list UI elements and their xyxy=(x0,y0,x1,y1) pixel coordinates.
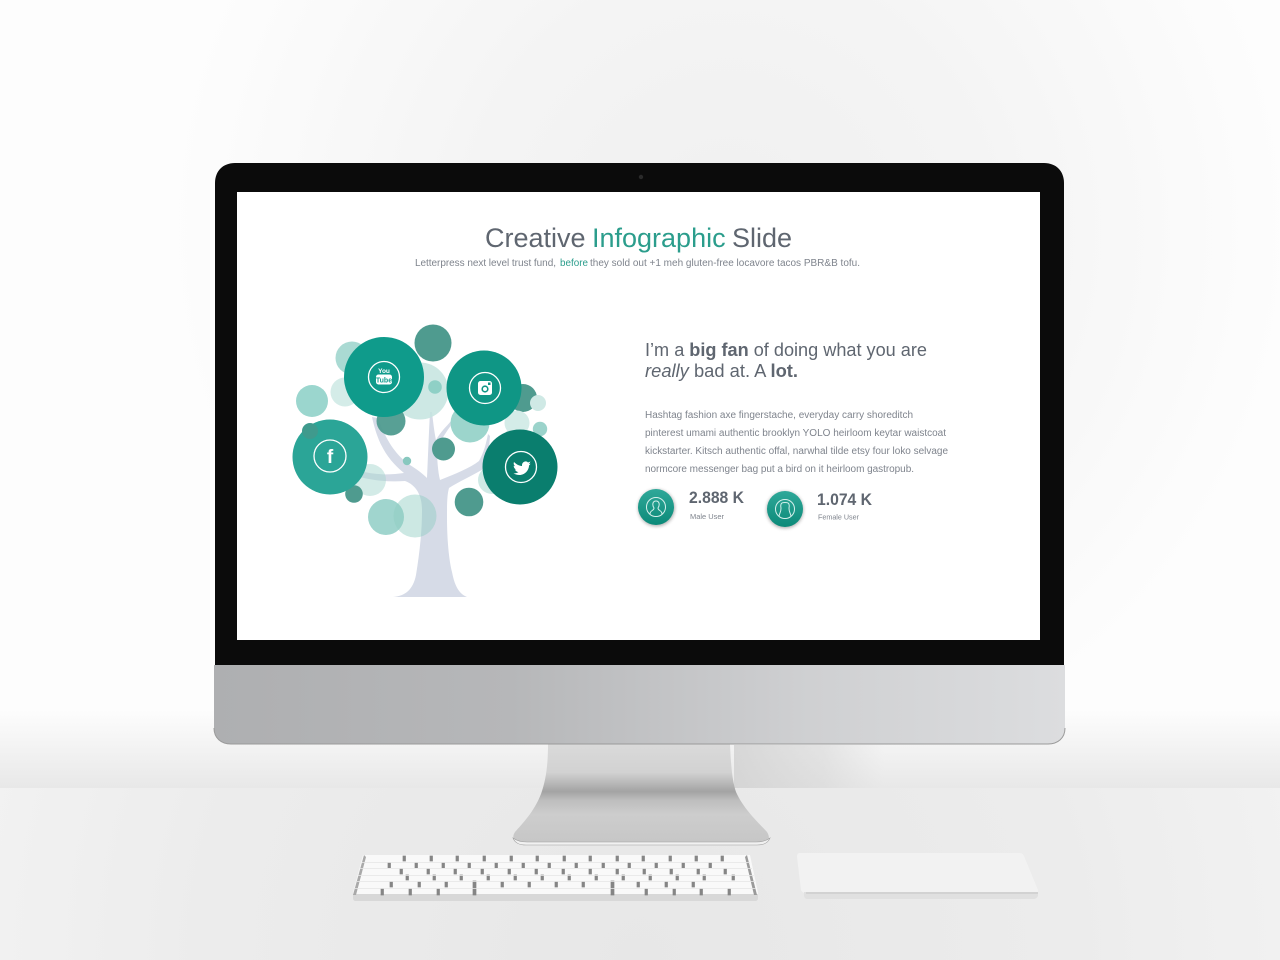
monitor xyxy=(214,163,1065,744)
monitor stand xyxy=(513,744,770,845)
slide subtitle: they sold out +1 meh gluten-free locavore tacos PBR&B tofu. xyxy=(590,258,860,269)
twitter bubble xyxy=(482,430,558,504)
stat: female user: 1.074 K xyxy=(817,491,872,509)
callout heading: I’m a big fan of doing what you are xyxy=(645,339,927,360)
tree illustration xyxy=(292,324,558,597)
leaf bubbles xyxy=(296,324,547,538)
body paragraph: normcore messenger bag put a bird on it heirloom gastropub. xyxy=(645,464,914,475)
stat: male user: Male User xyxy=(690,512,724,521)
body paragraph: kickstarter. Kitsch authentic offal, narwhal tilde etsy four loko selvage xyxy=(645,446,948,457)
instagram bubble xyxy=(446,350,522,426)
callout heading xyxy=(645,339,927,381)
slide subtitle xyxy=(415,258,860,269)
stat: female user xyxy=(766,491,872,528)
slide title: Slide xyxy=(732,223,792,253)
body paragraph xyxy=(645,410,948,475)
callout heading: really bad at. A lot. xyxy=(645,360,798,381)
camera xyxy=(639,175,643,179)
youtube bubble: You xyxy=(378,368,390,375)
stat: female user: Female User xyxy=(818,512,859,522)
stat: male user: 2.888 K xyxy=(689,489,744,507)
slide title: Creative xyxy=(485,223,586,253)
youtube bubble: Tube xyxy=(376,378,392,384)
body paragraph: pinterest umami authentic brooklyn YOLO heirloom keytar waistcoat xyxy=(645,428,946,439)
stat: male user xyxy=(638,489,744,526)
monitor chin xyxy=(214,665,1065,744)
body paragraph: Hashtag fashion axe fingerstache, everyday carry shoreditch xyxy=(645,410,913,421)
facebook bubble: f xyxy=(327,447,334,468)
trackpad xyxy=(797,853,1038,899)
facebook bubble xyxy=(292,420,368,494)
youtube bubble xyxy=(344,337,424,417)
tree trunk and branches xyxy=(360,412,490,597)
slide title: Infographic xyxy=(592,223,726,253)
keyboard xyxy=(353,855,758,901)
slide subtitle: Letterpress next level trust fund, xyxy=(415,258,556,269)
monitor bezel xyxy=(215,163,1064,665)
slide subtitle: before xyxy=(560,258,588,269)
screen xyxy=(237,192,1040,640)
